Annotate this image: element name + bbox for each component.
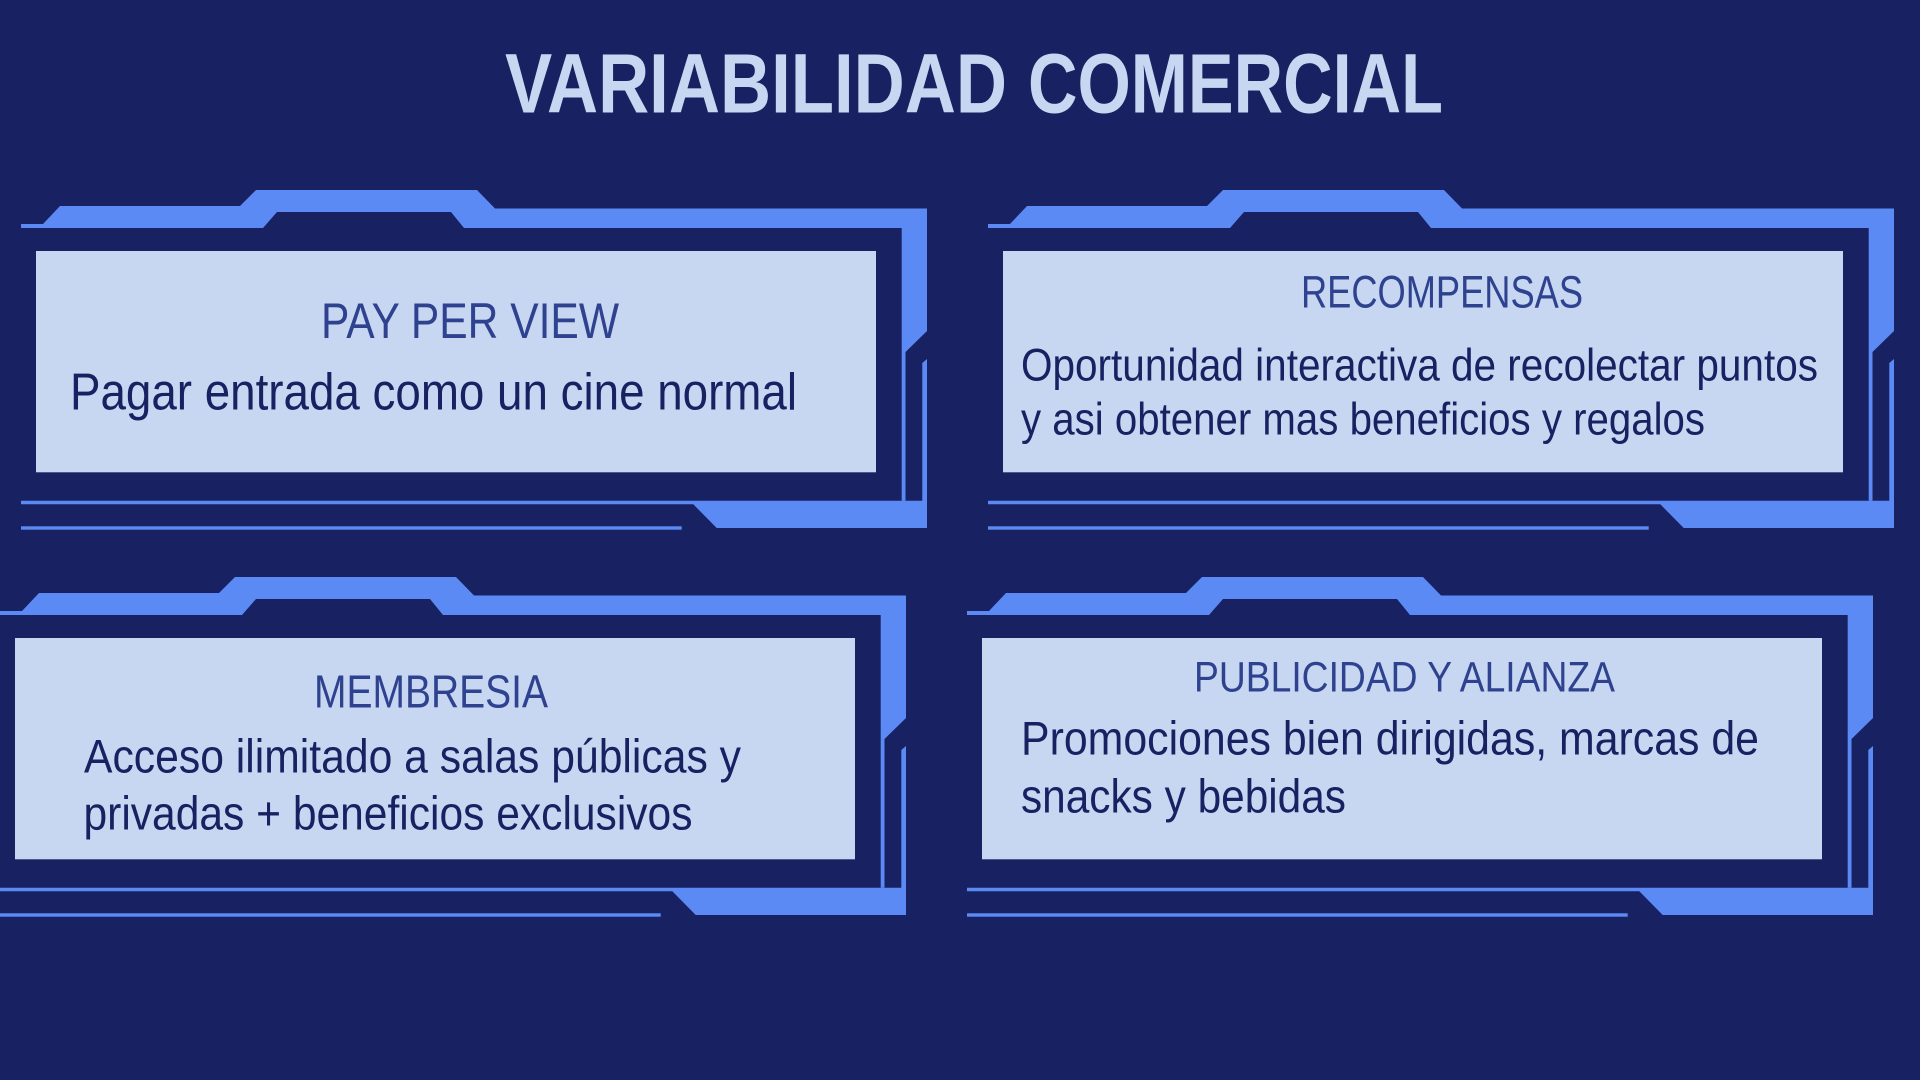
text: publicidad y alianza description: snacks y bebidas	[1021, 770, 1346, 823]
panel: membresia	[0, 577, 906, 917]
content box: pay per view	[36, 251, 876, 472]
heading: membresia: MEMBRESIA	[314, 666, 548, 718]
panel: recompensas	[988, 190, 1894, 530]
title	[505, 37, 1443, 131]
text: pay per view description: Pagar entrada como un cine normal	[70, 363, 797, 421]
text: membresia description: privadas + beneficios exclusivos	[84, 786, 692, 839]
tech frame: publicidad y alianza	[967, 577, 1873, 917]
text: recompensas description	[1021, 340, 1818, 444]
content box: publicidad y alianza	[982, 638, 1822, 859]
text: publicidad y alianza description	[1021, 711, 1759, 823]
tech frame: recompensas	[988, 190, 1894, 530]
tech frame: membresia	[0, 577, 906, 917]
panel: pay per view	[21, 190, 927, 530]
text: membresia description: Acceso ilimitado a salas públicas y	[84, 730, 741, 783]
text: recompensas description: y asi obtener mas beneficios y regalos	[1021, 393, 1705, 444]
content box: membresia	[15, 638, 855, 859]
panel: publicidad y alianza	[967, 577, 1873, 917]
heading: recompensas: RECOMPENSAS	[1301, 266, 1583, 318]
text: membresia description	[84, 730, 741, 839]
tech frame: pay per view	[21, 190, 927, 530]
title: COMERCIAL	[1028, 37, 1443, 131]
title: VARIABILIDAD	[505, 37, 1007, 131]
content box: recompensas	[1003, 251, 1843, 472]
heading: pay per view: PAY PER VIEW	[321, 293, 620, 349]
heading: publicidad y alianza: PUBLICIDAD Y ALIANZA	[1194, 654, 1615, 702]
text: publicidad y alianza description: Promociones bien dirigidas, marcas de	[1021, 711, 1759, 764]
text: recompensas description: Oportunidad interactiva de recolectar puntos	[1021, 340, 1818, 390]
